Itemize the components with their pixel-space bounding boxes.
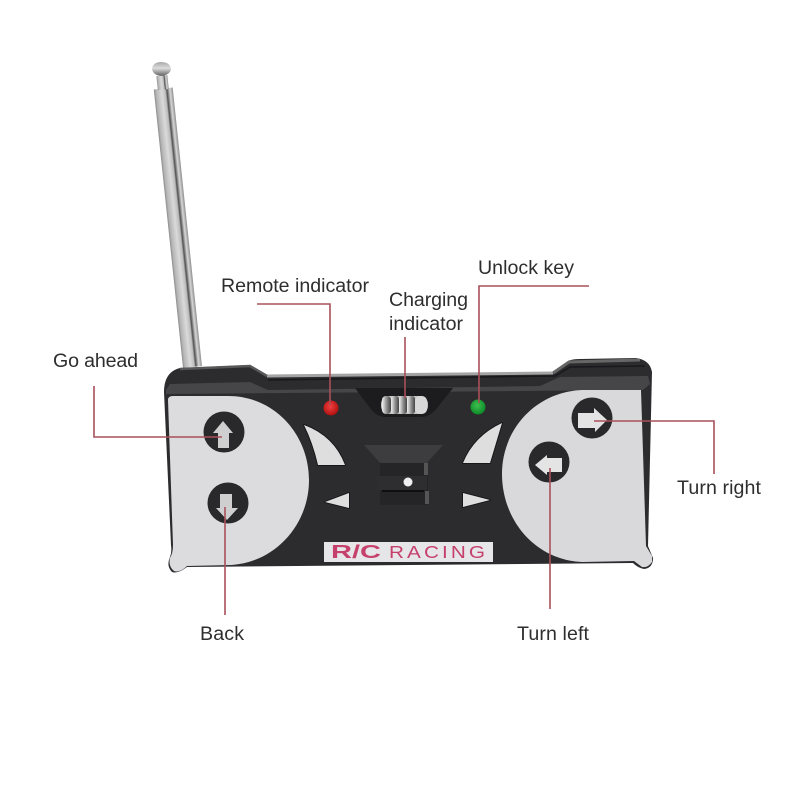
callout: charging indicator: indicator [389, 313, 463, 335]
callout: back [200, 507, 244, 645]
button: turn right [572, 398, 612, 438]
callout: turn right: Turn right [677, 477, 762, 499]
callout: charging indicator: Charging [389, 289, 468, 311]
R/C RACING badge: R/C [331, 542, 381, 562]
button: back [208, 482, 248, 524]
callout: charging indicator [389, 289, 468, 398]
remote indicator LED [324, 400, 338, 416]
remote body [164, 358, 653, 572]
right silver button panel [502, 390, 652, 567]
button: go ahead [204, 412, 244, 452]
left curved direction marker [304, 425, 345, 465]
right triangle marker [463, 493, 490, 507]
callout: remote indicator [221, 275, 369, 405]
top lip of remote body [166, 360, 650, 394]
callout: unlock key [478, 257, 589, 403]
R/C RACING badge: RACING [389, 542, 485, 563]
callout: turn right [594, 421, 762, 499]
button: turn left [528, 442, 570, 482]
R/C RACING badge [324, 542, 493, 563]
callout: go ahead: Go ahead [53, 350, 138, 372]
charging slot with spring contacts [355, 388, 453, 417]
callout: remote indicator: Remote indicator [221, 275, 369, 297]
callout: go ahead [53, 350, 222, 437]
centre switch [364, 445, 443, 505]
antenna [152, 62, 202, 368]
unlock key LED [470, 400, 486, 414]
left triangle marker [325, 493, 349, 508]
callout: back: Back [200, 623, 244, 645]
right curved direction marker [463, 423, 502, 463]
left silver button panel [168, 396, 309, 571]
callout: turn left: Turn left [517, 623, 590, 645]
callout: unlock key: Unlock key [478, 257, 574, 279]
